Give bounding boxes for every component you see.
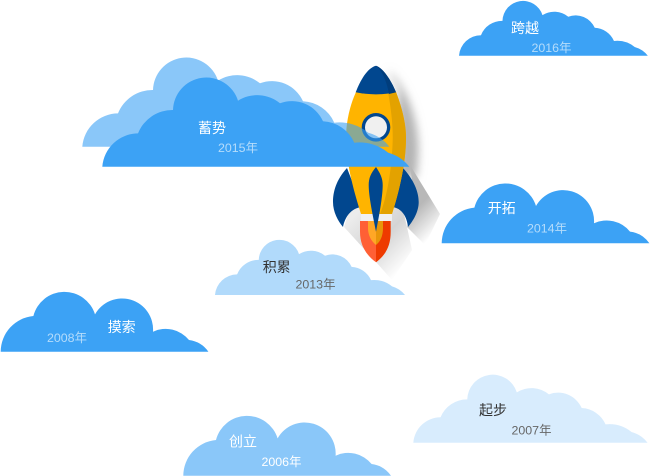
- cloud: 2008 摸索: 摸索: [108, 319, 136, 335]
- cloud: 2007 起步: 2007年: [512, 424, 551, 438]
- left fin: [333, 168, 362, 227]
- cloud: 2007 起步: 起步: [479, 402, 507, 418]
- flame: [360, 221, 391, 262]
- rocket shadow: [344, 70, 440, 280]
- cloud: 2006 创立: [183, 416, 391, 476]
- cloud: 2006 创立: 2006年: [262, 455, 301, 469]
- cloud: 2008 摸索: 2008年: [47, 331, 87, 345]
- porthole: [362, 113, 390, 142]
- cloud: 2016 跨越: 跨越: [511, 20, 539, 36]
- cloud: 2007 起步: [413, 375, 648, 443]
- cloud: 2016 跨越: [459, 1, 648, 56]
- centre fin: [369, 167, 383, 232]
- cloud: 2014 开拓: [442, 183, 649, 243]
- cloud: 2008 摸索: [1, 292, 208, 352]
- cloud: 2016 跨越: 2016年: [532, 41, 571, 55]
- cloud: 2014 开拓: 开拓: [488, 200, 516, 216]
- cloud: 2013 积累: 积累: [263, 259, 291, 275]
- nose cone: [356, 66, 396, 94]
- cloud: 2015 蓄势: 蓄势: [198, 120, 226, 136]
- body shaded side: [380, 92, 406, 214]
- cloud: 2014 开拓: 2014年: [527, 222, 567, 236]
- cloud: 2015 back layer: [82, 58, 389, 147]
- rocket body: [346, 92, 406, 214]
- cloud: 2013 积累: 2013年: [296, 278, 335, 292]
- right fin: [392, 168, 419, 227]
- cloud: 2015 蓄势: 2015年: [218, 141, 258, 155]
- rocket: [333, 66, 419, 262]
- cloud: 2015 蓄势: [102, 78, 409, 167]
- nozzle band: [361, 214, 392, 221]
- cloud: 2006 创立: 创立: [229, 434, 257, 450]
- cloud: 2013 积累: [215, 240, 405, 295]
